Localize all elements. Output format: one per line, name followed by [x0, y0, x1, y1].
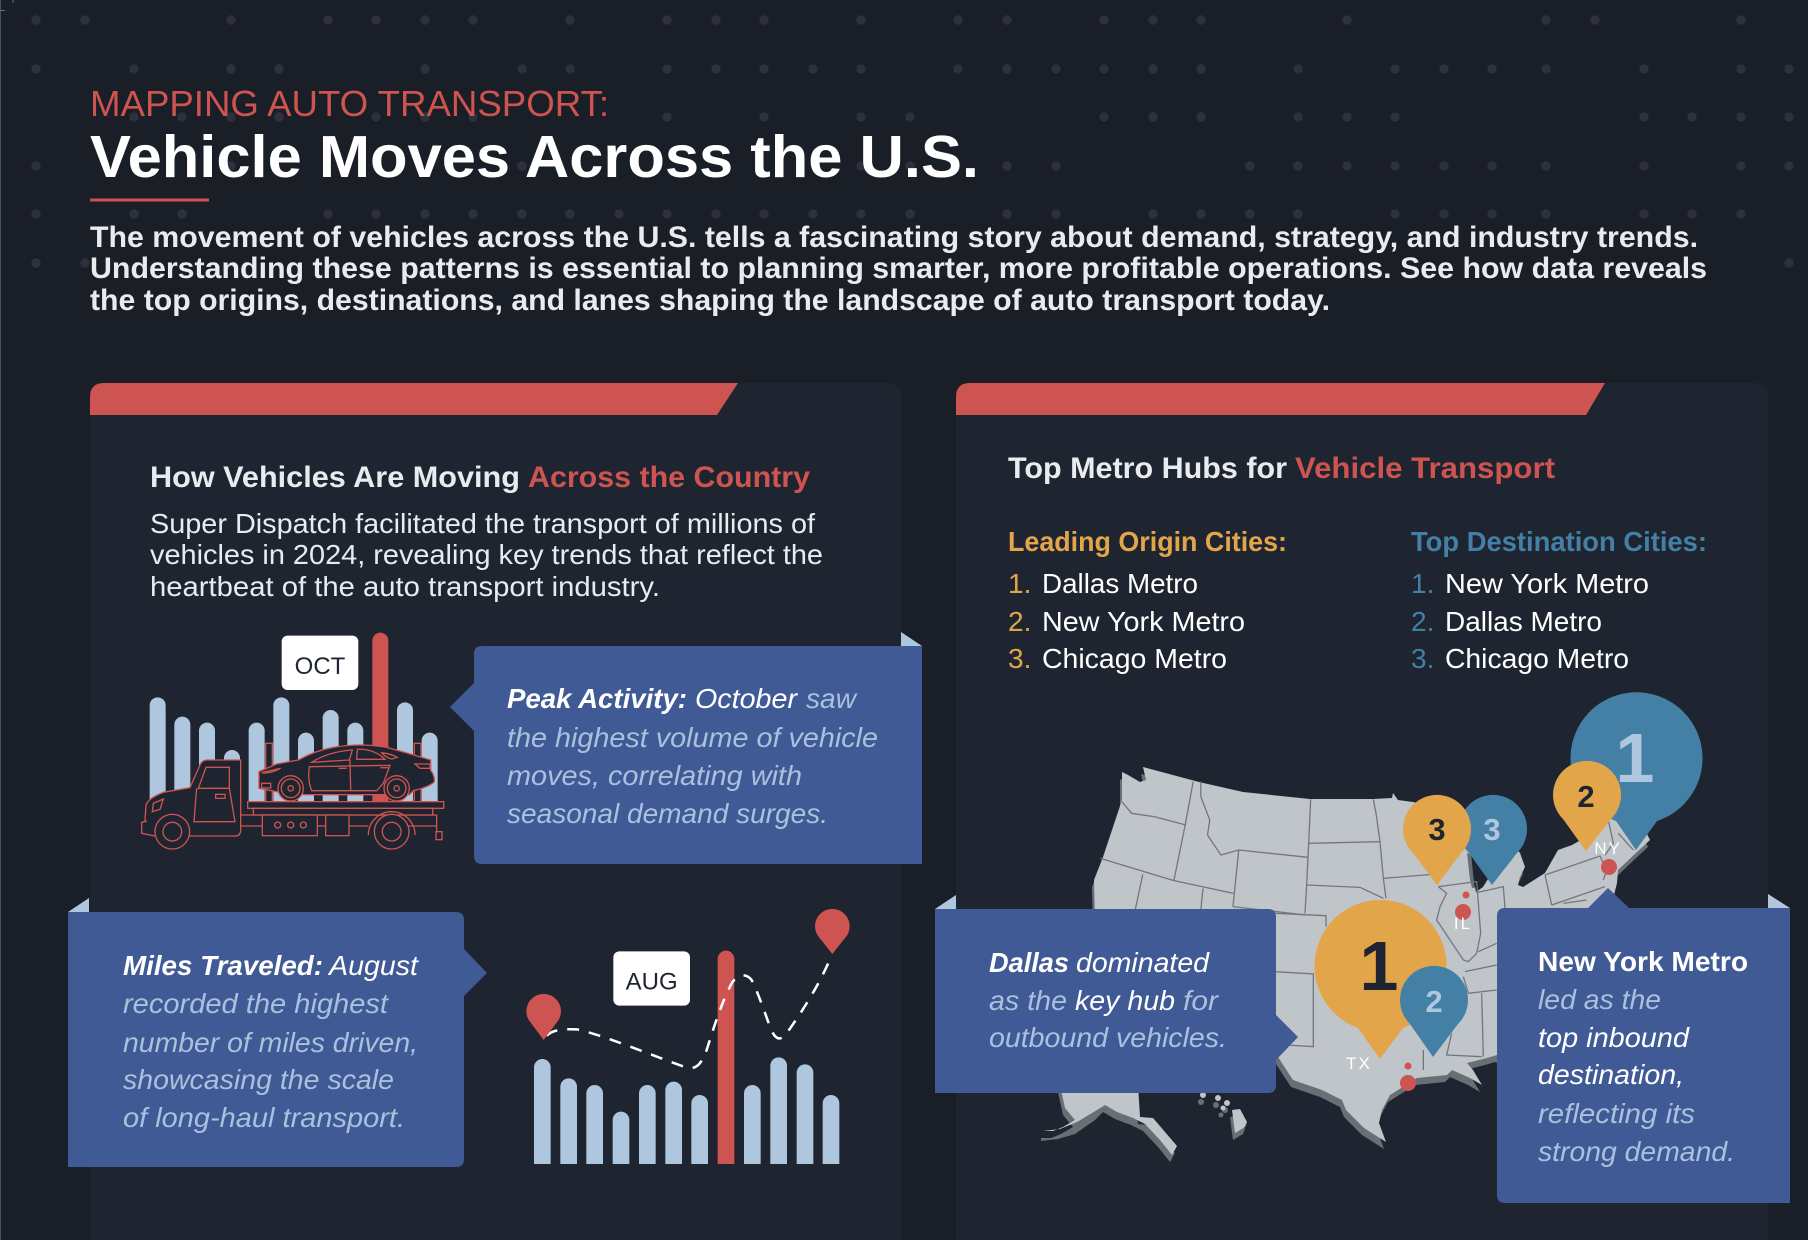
callout: miles traveled: of long-haul transport.	[123, 1102, 405, 1133]
callout: Dallas: key hub	[1075, 985, 1175, 1016]
list: top destination cities: 1.	[1411, 568, 1434, 599]
pin: destination 2 Dallas	[1400, 966, 1468, 1057]
callout: New York Metro	[1497, 888, 1790, 1203]
main heading: Vehicle Moves Across the U.S.	[90, 124, 979, 190]
map: United States	[1041, 692, 1703, 1162]
icon: tow truck carrying car	[142, 743, 444, 849]
callout: New York Metro: top inbound	[1538, 1022, 1690, 1053]
list: top destination cities: Dallas Metro	[1445, 606, 1602, 637]
callout: Dallas	[935, 895, 1298, 1093]
callout: miles traveled: recorded the highest	[123, 988, 389, 1019]
state borders	[1100, 782, 1633, 1070]
panel: how vehicles are moving	[68, 383, 922, 1240]
panel: top metro hubs	[935, 383, 1790, 1240]
list: top destination cities: 2.	[1411, 606, 1434, 637]
list: top destination cities: Top Destination Cities:	[1411, 526, 1707, 557]
pin: destination 3 Chicago	[1459, 795, 1527, 885]
label: OCT: OCT	[295, 653, 346, 680]
panel body text: vehicles in 2024, revealing key trends that reflect the	[150, 539, 823, 570]
callout: New York Metro: led as the	[1538, 984, 1661, 1015]
map land	[1043, 767, 1650, 1155]
pin: destination 1 New York	[1571, 692, 1703, 850]
bars	[534, 951, 839, 1164]
chart: monthly miles with route line	[526, 909, 850, 1164]
callout: miles traveled: number of miles driven,	[123, 1027, 418, 1058]
map markers and state labels	[1346, 839, 1622, 1091]
list: leading origin cities: 1.	[1008, 568, 1031, 599]
map shadow	[1041, 774, 1648, 1162]
callout: miles traveled: August	[327, 950, 419, 981]
callout: peak activity: saw	[806, 683, 858, 714]
intro paragraph: Understanding these patterns is essential to planning smarter, more profitable operations. See how data reveals	[90, 252, 1707, 285]
list: leading origin cities: Dallas Metro	[1042, 568, 1198, 599]
label: AUG	[613, 951, 690, 1006]
map markers and state labels: NY	[1594, 839, 1622, 858]
list: leading origin cities: Leading Origin Cities:	[1008, 526, 1287, 557]
pin: origin 1 Dallas	[1315, 900, 1447, 1059]
chart: monthly vehicle moves with truck	[142, 633, 444, 849]
panel heading: Top Metro Hubs for	[1008, 452, 1287, 485]
title	[90, 83, 979, 190]
list: leading origin cities: 3.	[1008, 643, 1031, 674]
callout: Dallas: Dallas	[989, 947, 1069, 978]
callout: peak activity: seasonal demand surges.	[507, 798, 828, 829]
icon: start pin	[526, 994, 561, 1040]
callout: miles traveled	[68, 898, 487, 1167]
list: leading origin cities: Chicago Metro	[1042, 643, 1227, 674]
intro paragraph: The movement of vehicles across the U.S. tells a fascinating story about demand, strategy, and industry trends.	[90, 221, 1698, 254]
panel body text: Super Dispatch facilitated the transport of millions of	[150, 508, 815, 539]
list: leading origin cities: New York Metro	[1042, 606, 1245, 637]
pin: destination 2 Dallas: 2	[1425, 984, 1443, 1019]
list: leading origin cities: 2.	[1008, 606, 1031, 637]
panel body text	[150, 508, 823, 602]
pin: origin 1 Dallas: 1	[1360, 927, 1398, 1005]
list: top destination cities: 3.	[1411, 643, 1434, 674]
intro paragraph: the top origins, destinations, and lanes shaping the landscape of auto transport today.	[90, 284, 1330, 317]
label: OCT	[282, 636, 358, 690]
intro paragraph	[90, 221, 1707, 317]
list: leading origin cities	[1008, 526, 1287, 674]
panel body text: heartbeat of the auto transport industry.	[150, 571, 660, 602]
callout: Dallas: dominated	[1076, 947, 1210, 978]
list: top destination cities	[1411, 526, 1707, 674]
callout: peak activity: the highest volume of vehicle	[507, 722, 878, 753]
pin: origin 2 New York: 2	[1577, 779, 1595, 814]
map markers and state labels: TX	[1346, 1054, 1372, 1073]
panel heading: Vehicle Transport	[1295, 452, 1555, 485]
callout: peak activity	[450, 632, 922, 864]
callout: Dallas: for	[1183, 985, 1220, 1016]
map markers and state labels: IL	[1454, 914, 1472, 933]
dashed route line	[547, 955, 832, 1068]
lake michigan	[1467, 845, 1500, 892]
list: top destination cities: Chicago Metro	[1445, 643, 1629, 674]
callout: peak activity: moves, correlating with	[507, 760, 802, 791]
callout: peak activity: October	[695, 683, 799, 714]
pin: destination 1 New York: 1	[1616, 719, 1654, 797]
pin: origin 3 Chicago: 3	[1428, 812, 1446, 847]
callout: miles traveled: Miles Traveled:	[123, 950, 323, 981]
icon: end pin	[815, 909, 850, 954]
callout: Dallas: outbound vehicles.	[989, 1022, 1227, 1053]
callout: New York Metro: strong demand.	[1538, 1136, 1735, 1167]
label: AUG: AUG	[626, 968, 678, 995]
list: top destination cities: New York Metro	[1445, 568, 1649, 599]
pin: origin 2 New York	[1553, 761, 1621, 851]
pin: destination 3 Chicago: 3	[1483, 812, 1501, 847]
panel heading	[1008, 452, 1555, 485]
bars	[150, 633, 438, 803]
callout: New York Metro: New York Metro	[1538, 946, 1748, 977]
callout: New York Metro: destination,	[1538, 1059, 1684, 1090]
callout: peak activity: Peak Activity:	[507, 683, 687, 714]
pin: origin 3 Chicago	[1403, 795, 1471, 885]
callout: miles traveled: showcasing the scale	[123, 1064, 394, 1095]
callout: New York Metro: reflecting its	[1538, 1098, 1695, 1129]
panel heading: How Vehicles Are Moving	[150, 461, 520, 494]
eyebrow heading: MAPPING AUTO TRANSPORT:	[90, 83, 609, 124]
panel heading	[150, 461, 810, 494]
callout: Dallas: as the	[989, 985, 1067, 1016]
panel heading: Across the Country	[528, 461, 810, 494]
